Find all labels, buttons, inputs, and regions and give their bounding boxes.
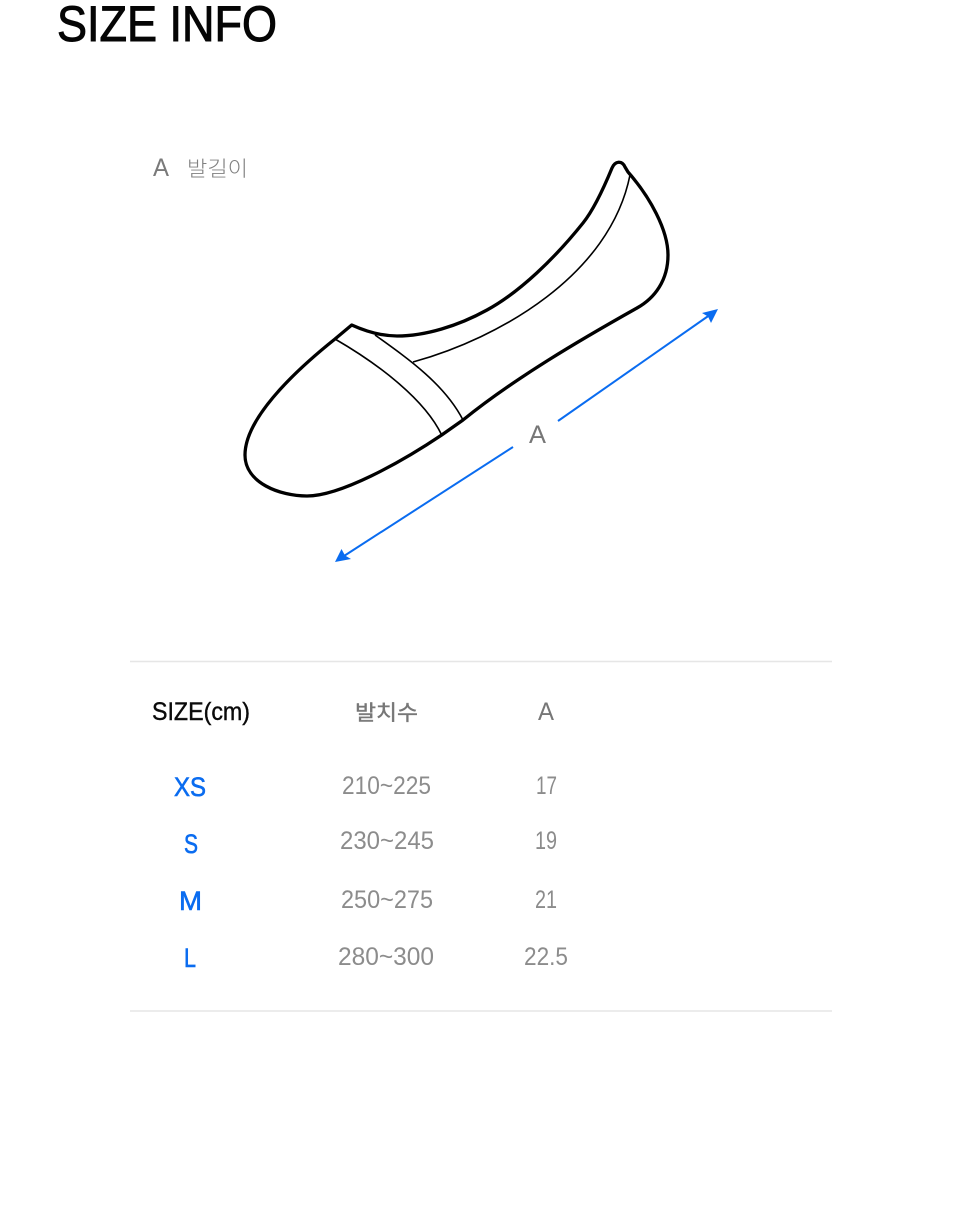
foot cover sock illustration bbox=[245, 162, 668, 496]
toe band lower seam bbox=[335, 339, 442, 435]
A values: 22.5 bbox=[524, 943, 568, 971]
foot size values: 280~300 bbox=[338, 943, 434, 971]
size labels: M bbox=[179, 886, 202, 916]
A values: 17 bbox=[536, 772, 557, 800]
table header: SIZE(cm) bbox=[152, 698, 250, 726]
table header: 발치수 bbox=[355, 702, 418, 725]
arrow: lower segment bbox=[335, 447, 513, 562]
foot size values: 210~225 bbox=[342, 772, 431, 800]
size labels: XS bbox=[174, 772, 206, 802]
A values bbox=[524, 772, 568, 971]
foot size values: 250~275 bbox=[341, 886, 433, 914]
size table bbox=[130, 662, 832, 1011]
foot size values bbox=[338, 772, 434, 971]
cuff seam bbox=[413, 175, 630, 362]
legend: A foot length: 발길이 bbox=[187, 158, 248, 181]
legend: A foot length: A bbox=[153, 154, 169, 182]
size labels: S bbox=[184, 829, 198, 859]
table header: A bbox=[538, 698, 554, 726]
dimension arrow A bbox=[335, 309, 718, 562]
table header bbox=[152, 698, 554, 726]
size labels bbox=[174, 772, 206, 973]
arrow: upper segment bbox=[558, 309, 718, 421]
A values: 19 bbox=[535, 827, 557, 855]
A values: 21 bbox=[535, 886, 557, 914]
foot size values: 230~245 bbox=[340, 827, 434, 855]
toe band upper seam bbox=[375, 335, 463, 420]
legend: A foot length bbox=[153, 154, 248, 182]
size labels: L bbox=[184, 943, 196, 973]
dimension label A: A bbox=[529, 421, 546, 449]
sock outline bbox=[245, 162, 668, 496]
